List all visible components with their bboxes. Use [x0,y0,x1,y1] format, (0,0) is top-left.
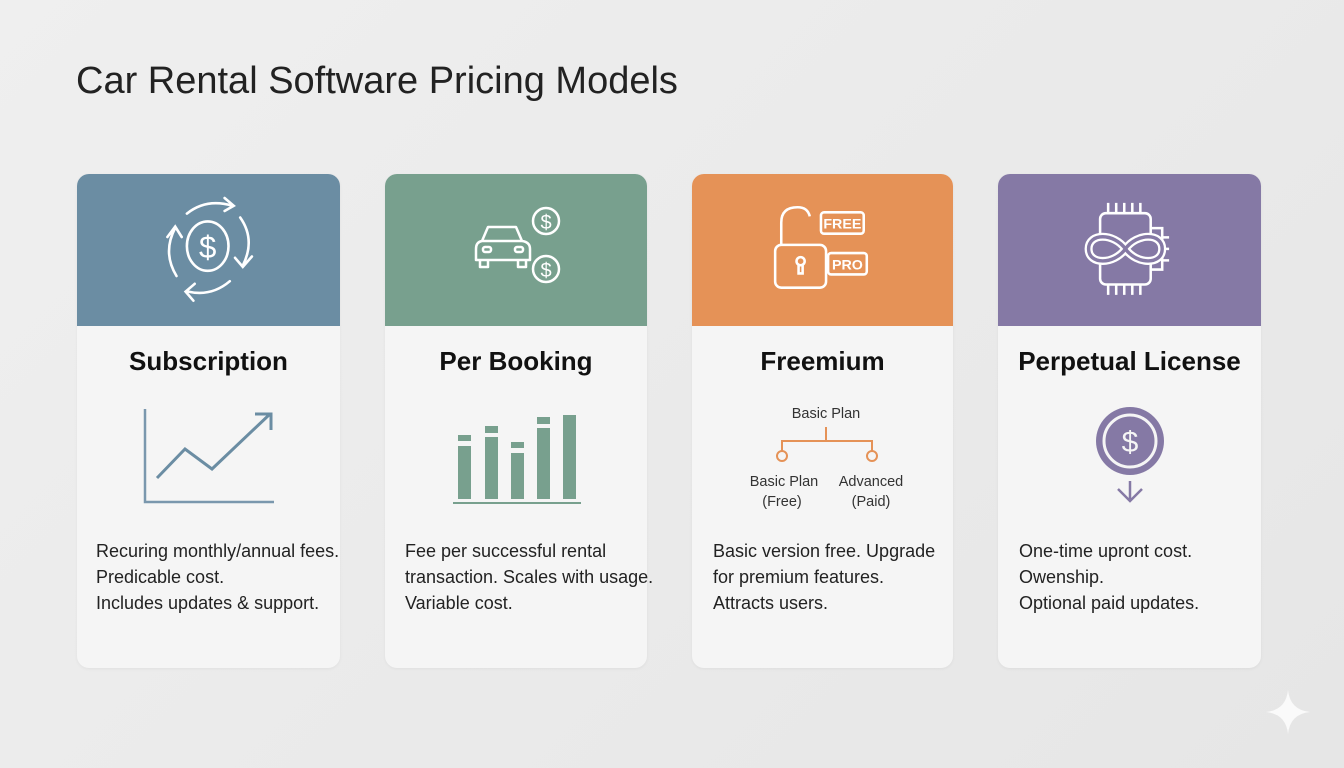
text: for premium features. [713,567,884,587]
diagram: plan tree: Basic Plan [750,474,818,490]
text: One-time upront cost. [1019,541,1192,561]
icon: lock with free/pro: PRO [831,257,862,273]
text: Fee per successful rental [405,541,606,561]
diagram: plan tree [750,406,903,510]
diagram: plan tree: (Free) [762,494,802,510]
icon: lock with free/pro: FREE [823,217,861,233]
diagram: plan tree: Advanced [839,474,903,490]
diagram: plan tree: Basic Plan [792,406,860,422]
heading: Perpetual License [1018,346,1241,376]
text: Recuring monthly/annual fees. [96,541,339,561]
panel: per booking [385,174,647,668]
chart: bars [453,415,581,504]
icon: infinity chip [998,174,1261,326]
icon: recurring dollar: $ [199,230,216,265]
chart: rising line [144,409,274,504]
text: Basic version free. Upgrade [713,541,935,561]
heading: Per Booking [439,346,593,376]
icon: car with coins: $ [540,260,552,282]
text [405,541,653,613]
icon: sparkle [1268,692,1309,732]
text [1019,541,1199,613]
text [96,541,339,613]
panel: subscription [77,174,340,668]
text: transaction. Scales with usage. [405,567,653,587]
icon: dollar coin down: $ [1122,426,1139,459]
diagram: plan tree: (Paid) [852,494,890,510]
icon: dollar coin down [1096,407,1164,503]
heading: Subscription [129,346,288,376]
text: Predicable cost. [96,567,224,587]
panel: freemium [692,174,953,668]
text [713,541,935,613]
icon: recurring dollar [77,174,340,326]
title: Car Rental Software Pricing Models [76,60,678,102]
icon: car with coins [385,174,647,326]
text: Attracts users. [713,593,828,613]
panel: perpetual license [998,174,1261,668]
heading: Freemium [760,346,885,376]
icon: lock with free/pro [692,174,953,326]
icon: car with coins: $ [540,212,552,234]
text: Includes updates & support. [96,593,319,613]
text: Optional paid updates. [1019,593,1199,613]
text: Owenship. [1019,567,1104,587]
text: Variable cost. [405,593,513,613]
